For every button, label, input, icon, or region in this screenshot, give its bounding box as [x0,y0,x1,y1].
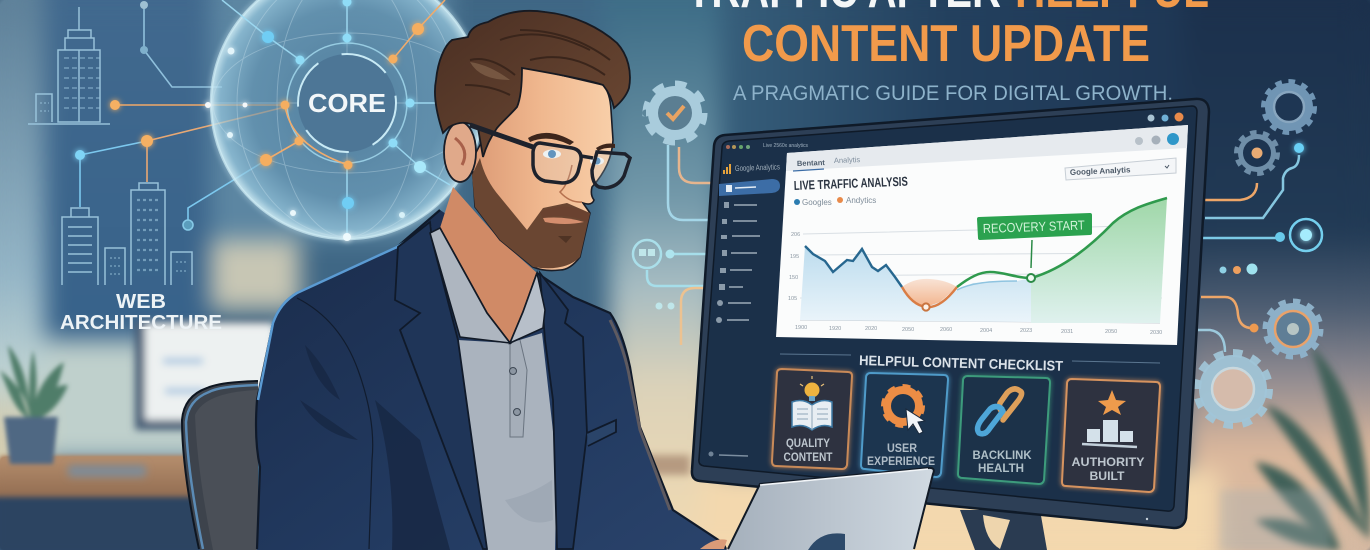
checklist heading: HELPFUL CONTENT CHECKLIST [859,352,1064,374]
lapels [395,222,616,549]
dashboard chart panel: Bentant [797,158,825,168]
label: web architecture [60,291,222,334]
icon: gear with orange dot [1236,132,1278,174]
card: authority built [1062,379,1160,492]
icon: gear with check [646,84,704,142]
line chart: 105 [788,296,797,302]
card: authority built: AUTHORITY [1072,455,1144,469]
web architecture illustration [28,7,192,285]
legend: Googles [802,198,832,207]
ear [444,122,476,182]
dashboard chart panel: Analytis [834,155,861,165]
laptop [700,468,934,550]
card: quality content [772,369,852,469]
label: core: CORE [308,88,386,118]
person [256,11,727,550]
line chart [788,198,1167,336]
dashboard chart panel [776,125,1188,345]
card: backlink health [958,376,1050,484]
card: user experience: EXPERIENCE [867,454,935,468]
monitor stand [960,510,1047,550]
subtitle: A PRAGMATIC GUIDE FOR DIGITAL GROWTH. [733,82,1173,105]
plant right [1220,345,1370,550]
left circuit decorations [633,145,714,345]
card: user experience [861,373,948,477]
line chart: 1920 [829,326,841,332]
label: web architecture: ARCHITECTURE [60,312,222,334]
line chart: 2060 [940,327,952,333]
shirt [458,322,557,550]
hair [435,11,630,157]
card: authority built: BUILT [1090,469,1125,483]
card: backlink health: BACKLINK [972,448,1032,462]
plant left [0,345,68,464]
icon: skyscrapers lower [62,183,192,285]
sidebar [716,162,780,323]
collar [430,228,545,343]
line chart: 1900 [795,325,807,331]
eyebrows [528,133,574,145]
icon: star and podium [1082,390,1137,447]
eyes [543,150,561,158]
callout: recovery start [977,213,1092,240]
line chart: 2023 [1020,328,1032,334]
nose [560,165,582,202]
line chart: 195 [790,254,799,260]
window controls [726,112,1184,149]
neck [440,187,537,343]
icon: gear top right [1264,82,1314,132]
beard [472,158,590,268]
line chart: 2030 [1150,330,1162,336]
right circuit decorations [1198,143,1322,352]
legend: Andytics [846,196,876,205]
dropdown: Google Analytis [1070,165,1131,177]
monitor [692,99,1209,528]
icon: book and bulb [792,376,832,430]
line chart: 2050 [1105,329,1117,335]
line chart: 2050 [902,327,914,333]
icon: chain link [978,389,1022,434]
line chart: 150 [789,275,798,281]
checklist heading [780,352,1160,374]
title: CONTENT UPDATE [742,15,1150,73]
line chart: 2031 [1061,329,1073,335]
card: user experience: USER [887,441,917,455]
glasses [470,125,630,188]
card: quality content: CONTENT [784,450,833,464]
jacket [256,210,727,550]
icon: gear and cursor [883,386,925,434]
globe: core network [205,0,483,241]
label: web architecture: WEB [116,291,166,313]
card: quality content: QUALITY [786,436,830,450]
icon: large gear [1197,353,1269,425]
chair [182,381,258,550]
line chart: 206 [791,232,800,238]
window controls: Live 2560x analytics [763,143,809,149]
icon: skyscrapers upper [28,7,110,124]
sidebar footer [708,452,1148,520]
dropdown [1065,158,1176,180]
card: backlink health: HEALTH [978,461,1024,475]
head [435,11,630,271]
line chart: 2020 [865,326,877,332]
sidebar: Google Analytics [735,162,780,173]
legend [794,196,876,207]
connector network [75,1,285,230]
icon: gear orange ring [1266,302,1320,356]
line chart: 2004 [980,328,992,334]
chart heading: LIVE TRAFFIC ANALYSIS [794,174,908,193]
callout: recovery start: RECOVERY START [983,217,1085,236]
